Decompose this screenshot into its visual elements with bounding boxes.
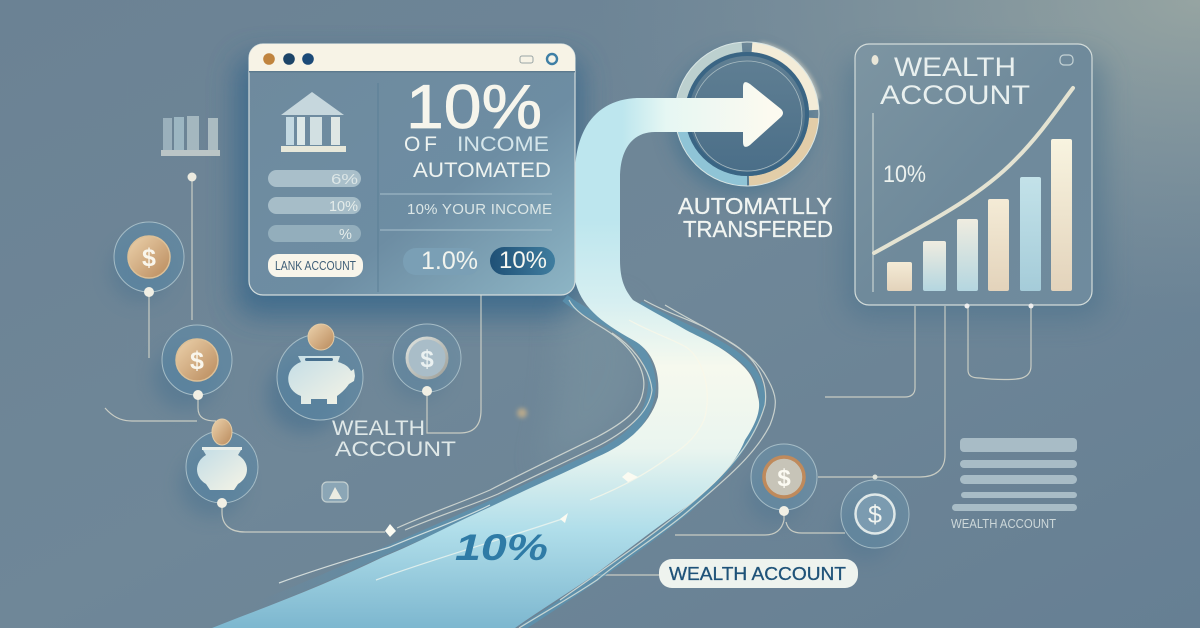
connector dot [188,172,196,182]
wealth account pill [659,559,858,588]
of income automated: AUTOMATED [413,159,551,182]
panel heading [880,52,1030,110]
road 10% label: 10% [455,527,548,568]
percentage pills: 10% [499,247,547,274]
transfer circle [670,42,819,194]
icon: coin on road right: $ [777,465,791,492]
road right blue edge [522,304,762,628]
icon: dollar outline [841,474,909,548]
flow road and arrow [212,175,775,628]
icon: bank [281,92,346,152]
legend list bars [952,438,1077,511]
panel: bank browser window [249,44,575,295]
wealth account label left [332,416,456,461]
icon: coin one: $ [142,244,156,272]
automatically transferred label: AUTOMATLLY [678,193,832,219]
wealth account pill: WEALTH ACCOUNT [669,564,846,584]
bar chart [887,139,1072,291]
arrow head and horizontal flow [575,82,783,220]
of income automated: OF [404,133,437,156]
wealth account label left: ACCOUNT [335,437,456,461]
icon: coin on road right [751,444,817,516]
small glass icon [322,482,348,502]
wealth account label left: WEALTH [332,416,425,440]
headline 10%: 10% [406,73,542,142]
icon: pot with coin [186,419,258,508]
sparkles [385,408,638,537]
progress rows: % [339,227,352,243]
icon: coin two [162,325,232,400]
bank account pill [268,254,363,277]
growth curve [874,88,1073,253]
icon: coin two: $ [190,347,204,375]
icon: silver coin [393,324,461,396]
of income automated: INCOME [457,133,549,156]
icon: coin one [114,222,184,297]
panel heading: ACCOUNT [880,80,1030,110]
legend caption: WEALTH ACCOUNT [951,517,1056,531]
road thin lines [279,300,775,628]
automatically transferred label [678,193,833,242]
icon: piggy bank [277,324,363,420]
your income line: 10% YOUR INCOME [407,201,552,218]
10% label: 10% [883,161,926,188]
progress rows: 6% [331,172,358,188]
road band [212,175,759,628]
icon: silver coin: $ [420,346,434,373]
percentage pills [403,247,555,275]
progress rows: 10% [329,199,358,215]
progress rows [268,170,361,243]
bank account pill: LANK ACCOUNT [275,259,356,273]
of income automated [404,133,551,182]
decorative connector lines [105,177,1031,575]
panel heading: WEALTH [894,52,1016,82]
panel: wealth account chart [855,44,1092,308]
small bank icon [161,116,220,156]
window title bar [249,44,575,72]
percentage pills: 1.0% [421,247,478,275]
automatically transferred label: TRANSFERED [683,216,833,242]
icon: dollar outline: $ [868,501,882,529]
road blue edge [262,298,652,604]
